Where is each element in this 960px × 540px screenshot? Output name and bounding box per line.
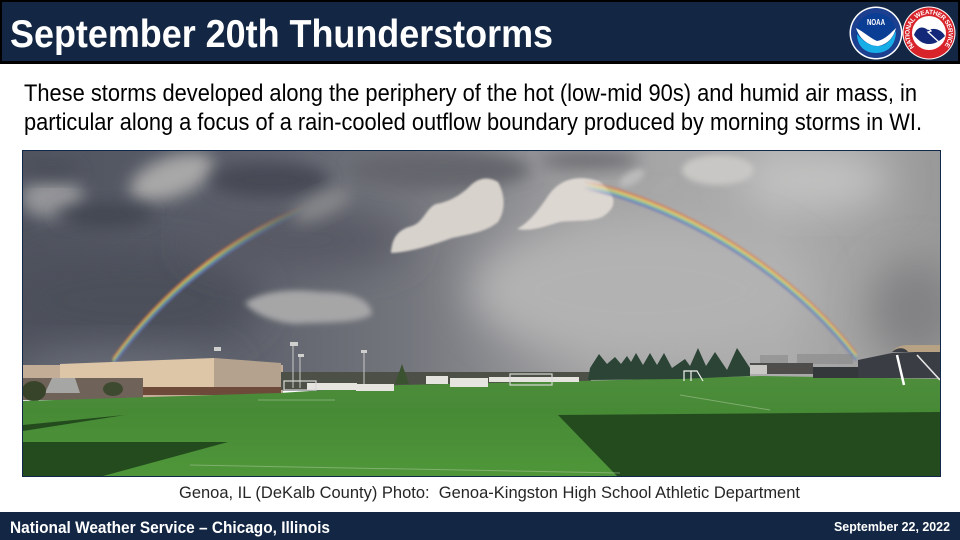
photo: rainbow over athletic field xyxy=(0,143,960,476)
sky xyxy=(0,143,960,400)
icon: National Weather Service logo: NATIONAL WEATHER SERVICE xyxy=(905,10,954,50)
title: September 20th Thunderstorms xyxy=(10,13,553,56)
clouds xyxy=(245,155,754,324)
footer bar xyxy=(0,512,960,540)
school building xyxy=(22,358,283,401)
photo caption: Genoa, IL (DeKalb County) Photo: Genoa-Kingston High School Athletic Department xyxy=(179,483,800,502)
icon: soccer goal xyxy=(684,371,703,381)
photo border xyxy=(22,150,940,476)
header bar xyxy=(0,0,960,64)
footer date: September 22, 2022 xyxy=(834,519,950,534)
icon: NOAA logo: NOAA xyxy=(867,18,885,27)
field lines xyxy=(190,395,770,473)
tree line xyxy=(588,348,750,380)
icon: NOAA logo xyxy=(850,6,902,60)
footer organization: National Weather Service – Chicago, Illinois xyxy=(10,518,330,537)
light poles and distant buildings xyxy=(214,342,579,391)
distant structures and gym on right xyxy=(750,345,940,385)
field shadows xyxy=(23,412,940,476)
rainbow xyxy=(113,173,856,366)
distant tree band xyxy=(281,372,591,390)
body text xyxy=(24,80,922,136)
grass field xyxy=(23,376,940,476)
